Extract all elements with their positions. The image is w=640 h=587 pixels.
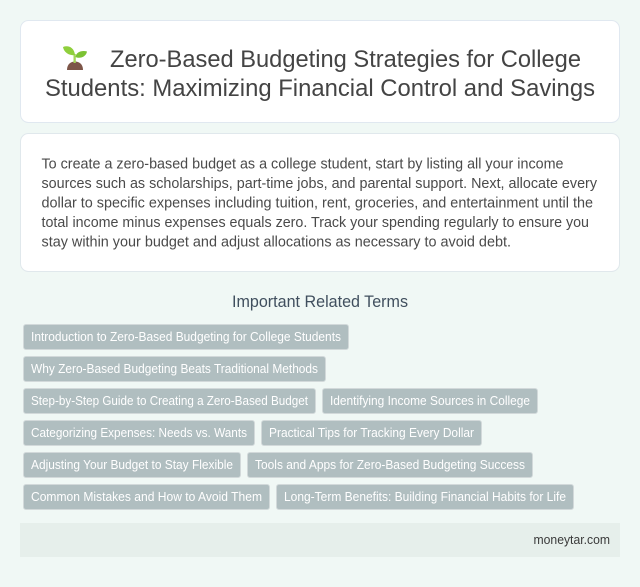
tag (24, 452, 240, 478)
tag: Tools and Apps for Zero-Based Budgeting Success (255, 458, 525, 472)
tag: Identifying Income Sources in College (330, 394, 530, 408)
summary paragraph: To create a zero-based budget as a college student, start by listing all your income (42, 155, 564, 172)
tag: Practical Tips for Tracking Every Dollar (269, 426, 474, 440)
tag (24, 324, 348, 350)
tag (248, 452, 532, 478)
tag (262, 420, 482, 446)
tag (24, 388, 316, 414)
tag: Why Zero-Based Budgeting Beats Traditional Methods (31, 362, 318, 376)
footer source text: moneytar.com (534, 533, 610, 547)
footer bar (20, 523, 620, 557)
tag: Adjusting Your Budget to Stay Flexible (31, 458, 233, 472)
tag (322, 388, 538, 414)
title text (45, 46, 595, 102)
title text: Students: Maximizing Financial Control and Savings (45, 75, 595, 102)
tag: Common Mistakes and How to Avoid Them (31, 490, 262, 504)
summary paragraph: sources such as scholarships, part-time jobs, and parental support. Next, allocate every (42, 175, 597, 192)
tag: Long-Term Benefits: Building Financial Habits for Life (284, 490, 566, 504)
summary paragraph: stay within your budget and adjust allocations as necessary to avoid debt. (42, 233, 511, 250)
tag: Step-by-Step Guide to Creating a Zero-Based Budget (31, 394, 308, 408)
panel: summary card (20, 134, 620, 272)
tag: Introduction to Zero-Based Budgeting for College Students (31, 330, 341, 344)
tag (24, 484, 270, 510)
tag: Categorizing Expenses: Needs vs. Wants (31, 426, 247, 440)
panel: related term tags (24, 324, 574, 510)
tag (276, 484, 574, 510)
summary paragraph: total income minus expenses equals zero. Track your spending regularly to ensure you (42, 214, 589, 231)
icon: seedling (63, 46, 87, 70)
panel: title card (20, 20, 620, 122)
title text: Zero-Based Budgeting Strategies for College (110, 46, 581, 73)
summary paragraph: dollar to specific expenses including tuition, rent, groceries, and entertainment until the (42, 194, 593, 211)
summary paragraph (42, 155, 597, 250)
heading: related terms: Important Related Terms (232, 293, 408, 311)
tag (24, 356, 326, 382)
tag (24, 420, 254, 446)
